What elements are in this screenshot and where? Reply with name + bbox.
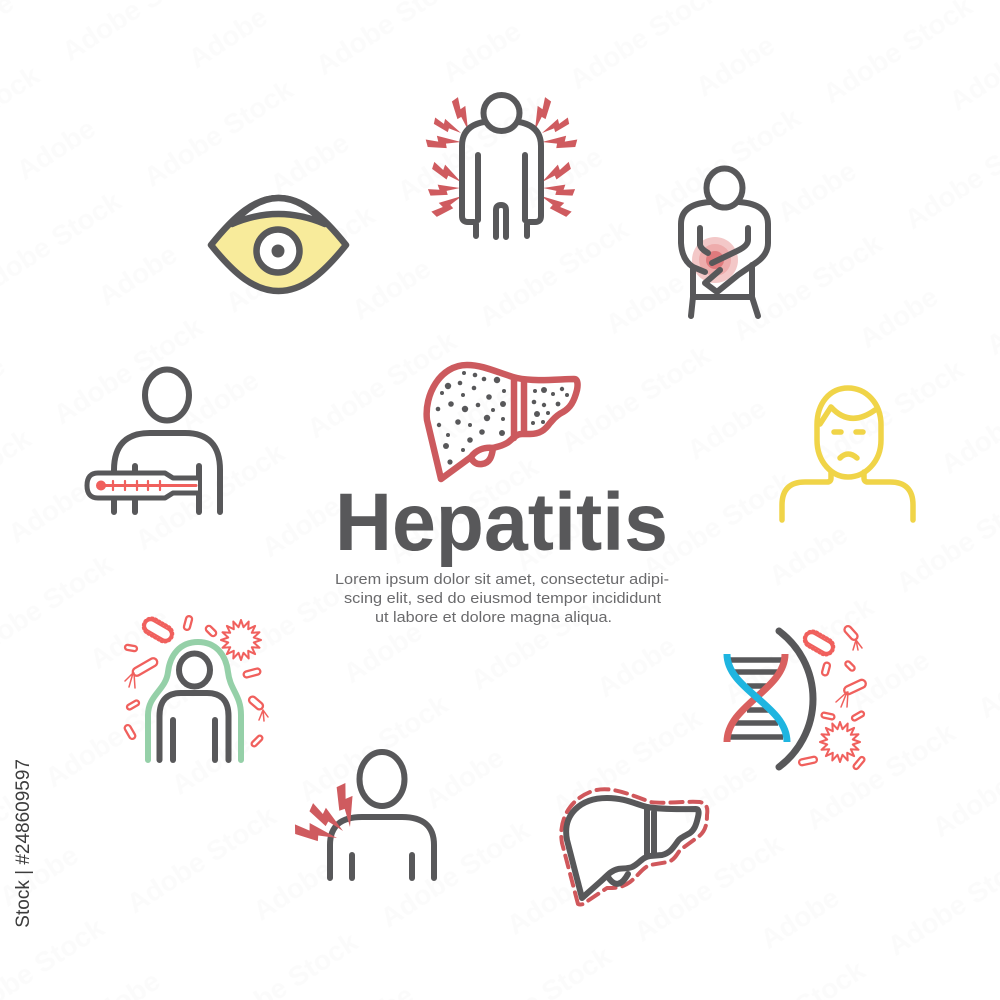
shoulder pain bolts (293, 782, 359, 845)
figure (681, 168, 768, 316)
thermometer scale (98, 481, 196, 490)
icon: stomach pain person (681, 168, 768, 316)
germs (799, 625, 867, 770)
icon: person with immunity shield and germs (124, 615, 268, 760)
green shield (148, 642, 241, 760)
liver spots (436, 371, 569, 465)
description text: Lorem ipsum dolor sit amet, consectetur adipi- (335, 571, 669, 588)
icon: person with shoulder pain (293, 752, 434, 878)
DNA strands (727, 654, 785, 742)
icon: DNA protected from germs (727, 625, 867, 770)
description text: ut labore et dolore magna aliqua. (375, 609, 612, 626)
description text: scing elit, sed do eiusmod tempor incididunt (344, 590, 662, 607)
icon: yellow eye (211, 198, 346, 291)
pain circles (692, 237, 738, 283)
figure (462, 95, 541, 237)
barrier arc (779, 631, 813, 767)
description text (335, 571, 669, 626)
icon: person with thermometer (87, 370, 220, 512)
DNA rungs (730, 660, 783, 737)
icon: central spotted liver (427, 365, 578, 479)
icon: body aches person (426, 95, 577, 237)
title: Hepatitis (335, 477, 668, 568)
pain bolts right (528, 96, 577, 219)
icon: liver with dashed outline (561, 789, 707, 904)
pain bolts left (426, 96, 475, 219)
image id side label: Stock | #248609597 (13, 759, 34, 928)
germs (124, 615, 268, 747)
thermometer (87, 473, 198, 498)
figure (160, 654, 228, 760)
icon: yellow man with sad face (782, 388, 913, 520)
